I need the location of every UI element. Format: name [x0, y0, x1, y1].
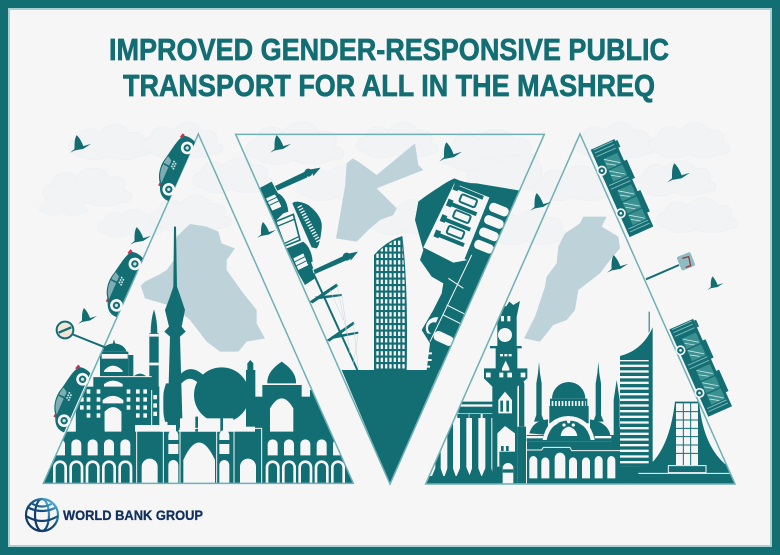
icon: taxi bottom [45, 362, 93, 433]
background clouds [39, 122, 738, 245]
skyline: Lebanon [427, 301, 737, 484]
logo: World Bank Group: WORLD BANK GROUP [63, 508, 203, 523]
skyline: Iraq [43, 227, 353, 483]
curved building [638, 402, 737, 484]
map: Iraq [141, 224, 265, 352]
highrise [620, 312, 653, 484]
title: IMPROVED GENDER-RESPONSIVE PUBLIC [109, 32, 669, 67]
triangle outline middle [236, 134, 544, 484]
triangle outline right [426, 134, 735, 484]
icon: no-entry sign [57, 322, 105, 347]
panel: Jordan triangle [236, 134, 544, 484]
title: TRANSPORT FOR ALL IN THE MASHREQ [123, 68, 655, 103]
icon: globe [26, 499, 58, 531]
icon: taxi top [149, 131, 198, 202]
temple columns [427, 402, 499, 484]
map: Jordan [336, 143, 423, 242]
skyline: Jordan [259, 168, 520, 484]
triangle outline left [43, 134, 353, 483]
bridge [309, 273, 358, 370]
rotated plaza [415, 178, 520, 370]
panel: Iraq triangle [43, 131, 353, 483]
birds [70, 135, 724, 324]
icon: bus bottom [666, 318, 735, 418]
panel: Lebanon triangle [426, 134, 737, 484]
tower [374, 236, 407, 370]
clock tower [484, 301, 527, 483]
title [109, 32, 669, 103]
mosque [526, 362, 639, 484]
rotated mosque [259, 168, 358, 285]
logo: World Bank Group [26, 499, 203, 531]
icon: bus top [588, 138, 656, 238]
map: Lebanon [524, 217, 620, 342]
icon: bus stop sign [646, 252, 696, 279]
solid base [342, 370, 439, 484]
icon: taxi middle [97, 247, 145, 318]
